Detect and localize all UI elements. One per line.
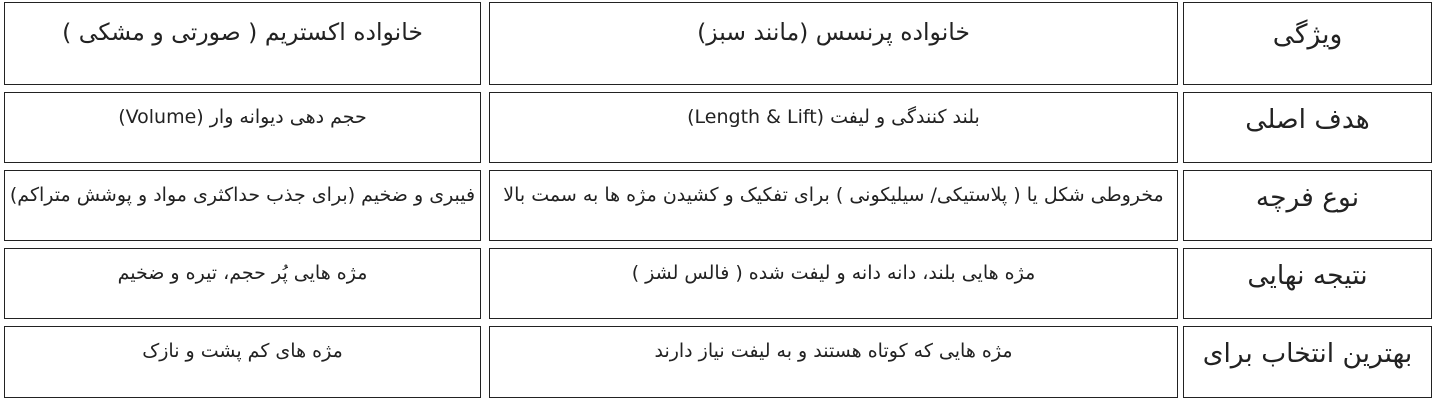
row: best choice for: بهترین انتخاب برای [1203,338,1412,369]
table: فیبری و ضخیم (برای جذب حداکثری مواد و پوشش متراکم) [10,184,475,206]
table: مخروطی شکل یا ( پلاستیکی/ سیلیکونی ) برای تفکیک و کشیدن مژه ها به سمت بالا [503,184,1164,206]
table: بلند کنندگی و لیفت (Length & Lift) [687,106,980,128]
header: extreme family [4,2,481,85]
row: brush type [1183,170,1432,241]
table: حجم دهی دیوانه وار (Volume) [118,106,367,128]
header: feature: ویژگی [1273,19,1342,50]
row: main goal [1183,92,1432,163]
table: مژه هایی بلند، دانه دانه و لیفت شده ( فالس لشز ) [632,262,1035,284]
row: main goal: هدف اصلی [1245,104,1370,135]
header: princess family [489,2,1178,85]
row: final result [1183,248,1432,319]
row: final result: نتیجه نهایی [1247,260,1368,291]
table: مژه هایی که کوتاه هستند و به لیفت نیاز دارند [654,340,1013,362]
header: extreme family: خانواده اکستریم ( صورتی و مشکی ) [62,18,423,46]
header: feature [1183,2,1432,85]
header: princess family: خانواده پرنسس (مانند سبز) [697,18,970,46]
row: best choice for [1183,326,1432,398]
table: مژه های کم پشت و نازک [142,340,343,362]
row: brush type: نوع فرچه [1256,182,1359,213]
table: مژه هایی پُر حجم، تیره و ضخیم [118,262,367,284]
